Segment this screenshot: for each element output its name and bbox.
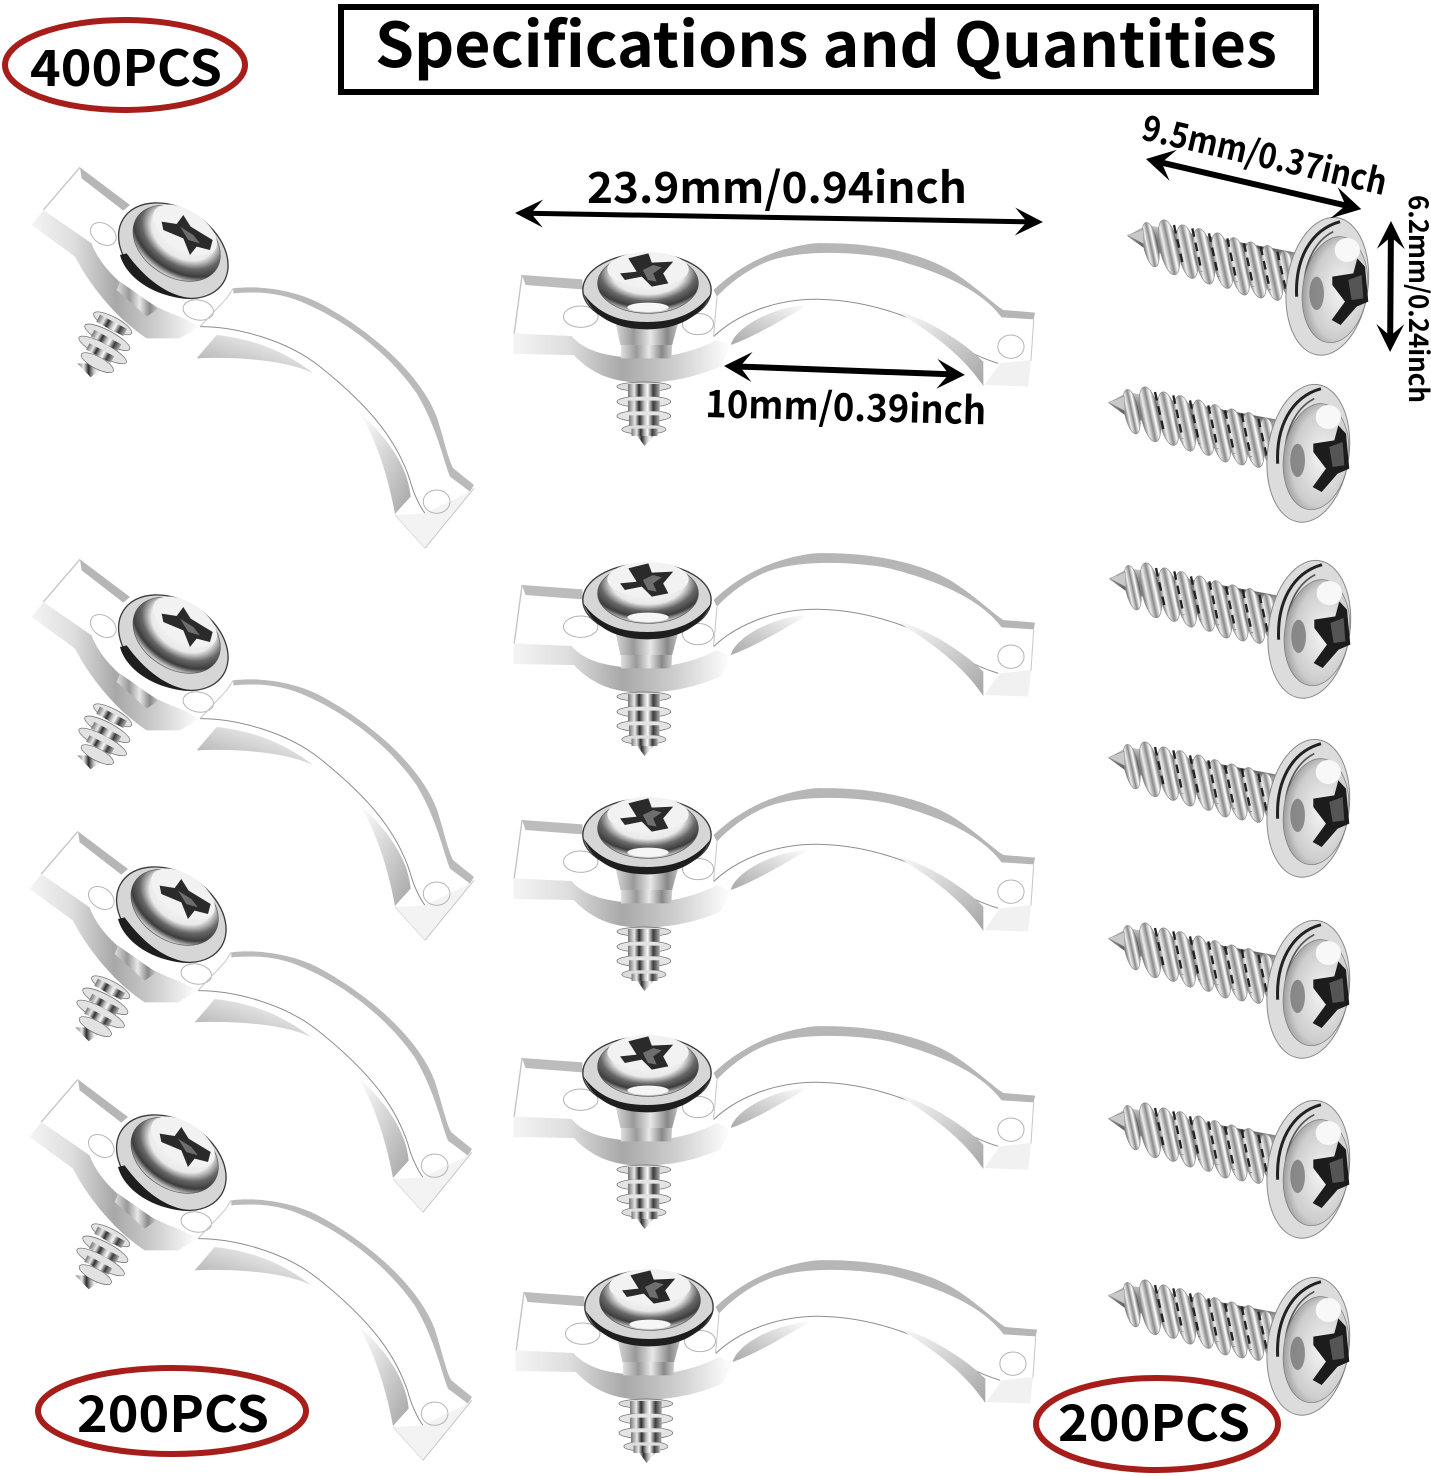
dimension: clip inner width bbox=[0, 0, 987, 435]
horizontal clip 1 bbox=[513, 243, 1035, 446]
badge: 200PCS clips bottom left bbox=[38, 1368, 306, 1454]
dimension: clip overall width: 23.9mm/0.94inch bbox=[587, 154, 967, 216]
horizontal clip 4 bbox=[513, 1026, 1035, 1229]
column of screws bbox=[1108, 212, 1377, 1421]
screw 3 bbox=[1109, 555, 1359, 704]
screw 4 bbox=[1108, 734, 1358, 883]
badge: 200PCS screws bottom right: 200PCS bbox=[1058, 1384, 1250, 1456]
screw 6 bbox=[1108, 1095, 1358, 1244]
badge: 400PCS top left bbox=[5, 20, 245, 110]
column of angled clips bbox=[30, 167, 474, 1460]
dimension: screw length: 9.5mm/0.37inch bbox=[1138, 100, 1393, 206]
screw 2 bbox=[1108, 379, 1358, 528]
dimension: screw head diameter bbox=[1376, 195, 1431, 403]
angled clip 2 bbox=[32, 559, 474, 940]
screw 1 bbox=[1127, 212, 1377, 361]
angled clip 4 bbox=[30, 1079, 472, 1460]
angled clip 1 bbox=[32, 167, 474, 548]
title box bbox=[341, 0, 1316, 92]
badge: 400PCS top left: 400PCS bbox=[30, 29, 222, 101]
horizontal clip 5 bbox=[515, 1260, 1037, 1463]
dimension: clip overall width bbox=[515, 154, 1043, 236]
horizontal clip 3 bbox=[513, 788, 1035, 991]
screw 7 bbox=[1108, 1272, 1358, 1421]
angled clip 3 bbox=[30, 831, 472, 1212]
badge: 200PCS clips bottom left: 200PCS bbox=[77, 1375, 269, 1447]
screw 5 bbox=[1108, 915, 1358, 1064]
column of horizontal clips bbox=[513, 243, 1037, 1463]
dimension: clip inner width: 10mm/0.39inch bbox=[705, 373, 987, 435]
horizontal clip 2 bbox=[513, 553, 1035, 756]
badge: 200PCS screws bottom right bbox=[1036, 1378, 1278, 1470]
